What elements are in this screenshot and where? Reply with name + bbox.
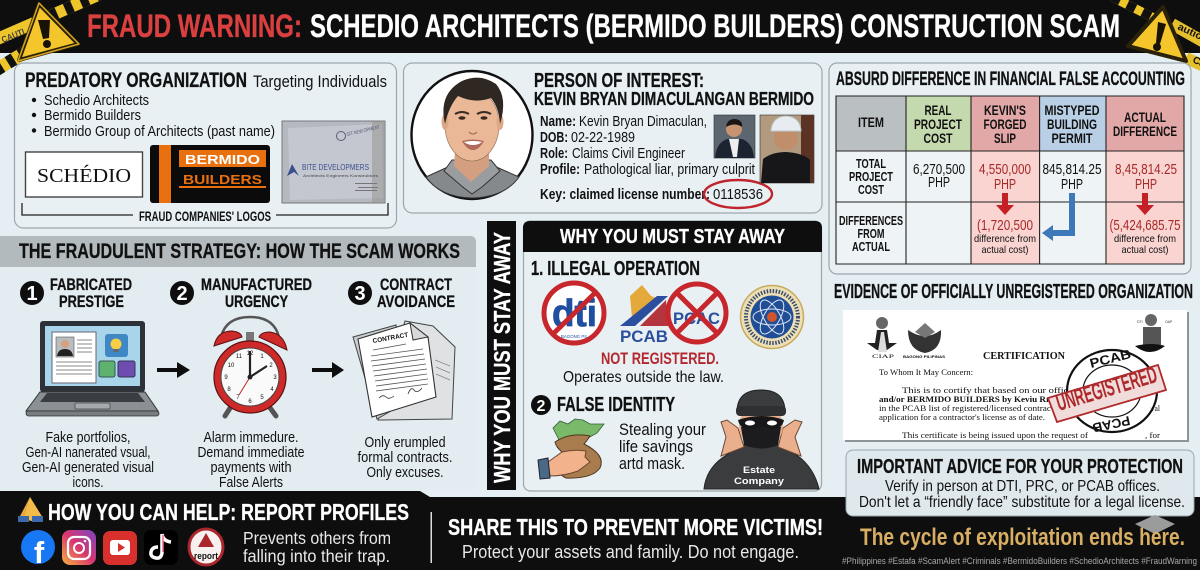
details list: Profile:	[540, 162, 580, 178]
logo: pcab: PCAB	[620, 327, 668, 346]
icon: alarm clock: 1	[260, 354, 264, 360]
document body text: and/or BERMIDO BUILDERS by Keviu Rr	[879, 395, 1051, 404]
heading bar	[523, 221, 822, 252]
icon: alarm clock	[214, 317, 287, 416]
table: DIFFERENCE	[1113, 123, 1177, 139]
icon: alarm clock: 12	[247, 351, 254, 357]
icon: alarm clock: 10	[228, 363, 235, 369]
key license number with red ellipse: Key: claimed license number:	[540, 187, 710, 203]
caption: step 3	[358, 434, 452, 481]
logo: bermido builders: BUILDERS	[183, 172, 262, 187]
caption: fraud companies logos bracket	[22, 203, 388, 224]
table	[836, 96, 1184, 264]
caption: step 2: Demand immediate	[198, 444, 304, 461]
table: difference from	[1114, 233, 1176, 245]
subheading: false identity: 2	[537, 398, 546, 415]
subheading: false identity	[531, 394, 675, 416]
stamp: pcab unregistered: PCAB	[1088, 346, 1132, 371]
text: not registered: Operates outside the law.	[563, 369, 724, 386]
table: PROJECT	[914, 116, 962, 132]
table: 6,270,500	[913, 162, 965, 178]
caption: step 2: False Alerts	[219, 474, 283, 491]
table: MISTYPED	[1044, 102, 1100, 118]
caption: step 3: Only erumpled	[364, 434, 446, 451]
icon: left caution tape and warning sign: CAUTI	[0, 27, 26, 45]
panel: certificate document	[843, 310, 1189, 442]
icon: alarm clock: 11	[236, 354, 243, 360]
icon: hand holding money bag	[538, 419, 604, 479]
icon: alarm clock: 4	[270, 387, 274, 393]
logo: bite developers business card	[282, 121, 385, 203]
help text: falling into their trap.	[243, 546, 390, 566]
icon: alarm clock: 6	[248, 399, 252, 405]
details list: DOB:	[540, 130, 568, 146]
footer: share call to action: Protect your assets and family. Do not engage.	[462, 542, 799, 562]
table: PHP	[994, 177, 1016, 193]
logo: bite developers business card: Architects Engineers Konstruktors	[303, 173, 378, 178]
stamp: pcab unregistered: PCAB	[1091, 413, 1131, 436]
logo: dti crossed out: BAGONG PIL	[561, 334, 588, 339]
logo: pcac crossed out	[668, 284, 726, 342]
step 3: contract avoidance	[348, 275, 455, 311]
footer: how you can help	[18, 497, 409, 570]
footer: share call to action	[448, 514, 823, 562]
step 3: contract avoidance: 3	[354, 283, 366, 305]
table: ITEM	[858, 114, 884, 130]
document body text	[879, 368, 1161, 440]
logo: bagong pilipinas: BAGONG PILIPINAS	[903, 354, 945, 359]
caption: step 3: formal contracts.	[358, 449, 452, 466]
table: actual cost)	[1122, 244, 1168, 256]
table: (1,720,500	[977, 218, 1033, 234]
help text	[243, 528, 391, 566]
table: BUILDING	[1047, 116, 1097, 132]
details list: Role:	[540, 146, 568, 162]
table: REAL	[924, 102, 952, 118]
icon: right caution tape and warning sign	[1112, 0, 1200, 70]
caption: step 1: Fake portfolios,	[46, 429, 130, 446]
text: stealing: artd mask.	[619, 454, 685, 473]
table: COST	[858, 182, 884, 197]
caption: step 2: payments with	[210, 459, 292, 476]
text: stealing: Stealing your	[619, 420, 706, 439]
text: stealing: life savings	[619, 437, 693, 456]
table: TOTAL	[856, 156, 886, 171]
document body text: in the PCAB list of registered/licensed contrac	[879, 404, 1052, 413]
logo: prc seal	[740, 286, 804, 348]
details list: 02-22-1989	[571, 130, 635, 146]
heading: predatory organization: PREDATORY ORGANIZATION	[25, 69, 247, 92]
table: PHP	[928, 175, 950, 191]
document body text: This certificate is being issued upon the request of	[902, 431, 1088, 440]
icon: instagram	[62, 530, 96, 565]
text: stealing	[619, 420, 706, 473]
document body text: wal	[1149, 404, 1161, 413]
icon: tiktok	[144, 530, 178, 565]
caption: step 2	[198, 429, 304, 491]
caption: step 1: Gen-AI nanerated vsual,	[26, 444, 150, 461]
step 1: fabricated prestige: FABRICATED	[50, 275, 132, 294]
icon: alarm clock: 5	[260, 395, 264, 401]
logo: dti crossed out	[544, 283, 604, 343]
step 1: fabricated prestige	[20, 275, 132, 311]
icon: alarm clock: 8	[227, 387, 231, 393]
heading: report profiles: HOW YOU CAN HELP: REPORT PROFILES	[48, 499, 409, 525]
heading: person of interest: KEVIN BRYAN DIMACULANGAN BERMIDO	[534, 89, 814, 109]
details list: Pathological liar, primary culprit	[584, 162, 755, 178]
icon: left caution tape and warning sign	[0, 0, 105, 70]
table: difference from	[974, 233, 1036, 245]
heading: person of interest	[534, 70, 814, 109]
icon: alarm clock: 9	[224, 375, 228, 381]
bullet list of names: Schedio Architects	[44, 93, 149, 109]
logo: right emblem: DTI	[1137, 320, 1143, 324]
advice text	[859, 478, 1185, 511]
step 1: fabricated prestige: PRESTIGE	[59, 292, 124, 311]
icon: masked thief estate company: Estate	[743, 465, 775, 476]
arrow: red down actual difference	[1136, 193, 1154, 215]
table: FORGED	[984, 116, 1026, 132]
step 1: fabricated prestige: 1	[26, 283, 38, 305]
panel: financial table	[829, 63, 1191, 274]
table: 845,814.25	[1042, 162, 1102, 178]
icon: masked thief estate company: Company	[734, 476, 785, 487]
logo: bermido builders	[150, 145, 270, 203]
icon: laptop	[26, 321, 159, 416]
title: FRAUD WARNING:	[87, 8, 302, 44]
table: actual cost)	[982, 244, 1028, 256]
table: PROJECT	[849, 169, 893, 184]
details list: Kevin Bryan Dimaculan,	[579, 114, 707, 130]
step 3: contract avoidance: AVOIDANCE	[377, 292, 455, 311]
icon: contract papers	[353, 321, 455, 420]
photo: suit	[714, 115, 755, 158]
photo: hard hat	[760, 115, 814, 183]
table: 4,550,000	[979, 162, 1031, 178]
table: PHP	[1061, 177, 1083, 193]
table: DIFFERENCES	[839, 213, 903, 228]
table: PERMIT	[1052, 130, 1093, 146]
table: SLIP	[994, 130, 1016, 146]
caption: step 1	[22, 429, 154, 491]
caption: step 1: Gen-AI generated visual	[22, 459, 154, 476]
logo: schedio: SCHÉDIO	[37, 164, 131, 187]
heading: fraudulent strategy	[0, 236, 476, 267]
table: FROM	[858, 226, 884, 241]
document body text: , for	[1145, 431, 1160, 440]
logo: right emblem: OAP	[1165, 320, 1173, 324]
illustration: portrait avatar	[412, 71, 532, 199]
panel: predatory organization	[14, 63, 396, 228]
table: PHP	[1135, 177, 1157, 193]
icon: youtube	[103, 531, 137, 565]
logo: dti crossed out: dti	[552, 293, 597, 335]
arrow: step 2 to 3	[312, 362, 344, 378]
heading bar: WHY YOU MUST STAY AWAY	[560, 226, 786, 248]
key license number with red ellipse: 0118536	[713, 187, 763, 203]
heading: person of interest: PERSON OF INTEREST:	[534, 70, 704, 92]
panel: important advice	[846, 450, 1194, 516]
table: COST	[924, 130, 953, 146]
icon: facebook: f	[34, 535, 45, 570]
caption: step 3: Only excuses.	[366, 464, 444, 481]
panel: why you must stay away	[523, 221, 822, 491]
icon: alarm clock: 7	[236, 395, 240, 401]
logo: pcab	[620, 285, 668, 346]
logo: ciap	[867, 317, 897, 360]
panel: fraudulent strategy	[0, 236, 476, 491]
text: not registered: NOT REGISTERED.	[601, 349, 719, 368]
arrow: step 1 to 2	[157, 362, 190, 378]
icon: gray graduation cap diamond	[1135, 515, 1175, 534]
icon: report badge: report	[194, 551, 219, 562]
step 2: manufactured urgency: 2	[176, 283, 188, 305]
logo: bagong pilipinas	[903, 323, 945, 359]
arrow: red down forged slip	[996, 193, 1014, 215]
icon: alarm clock: 3	[273, 375, 277, 381]
details list: Name:	[540, 114, 576, 130]
heading: fraudulent strategy: THE FRAUDULENT STRATEGY: HOW THE SCAM WORKS	[19, 240, 460, 263]
logo: right emblem	[1135, 314, 1173, 352]
caption: fraud companies logos bracket: FRAUD COMPANIES' LOGOS	[139, 209, 271, 224]
details list: Claims Civil Engineer	[572, 146, 685, 162]
bullet list of names: Bermido Builders	[44, 108, 141, 124]
logo: bite developers business card: GIT NEW OPMENT	[346, 124, 381, 138]
details list	[540, 114, 755, 178]
header band	[0, 0, 1200, 53]
subheading: illegal operation: 1. ILLEGAL OPERATION	[531, 258, 700, 280]
text: not registered	[563, 349, 724, 386]
table: ACTUAL	[1124, 109, 1166, 125]
table: (5,424,685.75	[1110, 218, 1180, 234]
icon: masked thief estate company	[704, 390, 819, 489]
logo: schedio	[26, 152, 142, 197]
arrow: blue elbow	[1042, 193, 1075, 241]
icon: praying hands	[18, 497, 43, 522]
document body text: To Whom It May Concern:	[879, 368, 973, 377]
step 2: manufactured urgency: URGENCY	[225, 292, 288, 311]
step 2: manufactured urgency: MANUFACTURED	[201, 275, 312, 294]
icon: report badge	[189, 529, 223, 565]
subheading: false identity: FALSE IDENTITY	[557, 394, 675, 416]
table: ACTUAL	[852, 239, 890, 254]
icon: alarm clock: 2	[269, 363, 273, 369]
logo: bite developers business card: BITE DEVELOPMERS	[302, 163, 369, 172]
table: KEVIN'S	[984, 102, 1026, 118]
panel: person of interest	[404, 63, 822, 213]
table: 8,45,814.25	[1115, 162, 1177, 178]
heading: predatory organization: Targeting Individuals	[253, 72, 387, 91]
logo: bermido builders: BERMIDO	[185, 152, 260, 167]
step 2: manufactured urgency	[170, 275, 312, 311]
document body text: application for a contractor's license as of date.	[879, 413, 1045, 422]
document body text: This is to cortify that based on our officicl a	[902, 386, 1087, 395]
footer: share call to action: SHARE THIS TO PREVENT MORE VICTIMS!	[448, 514, 823, 540]
caption: step 1: icons.	[72, 474, 104, 491]
icon: contract papers: CONTRACT	[372, 332, 409, 345]
vertical banner: why you must stay away: WHY YOU MUST STAY AWAY	[489, 232, 515, 483]
key license number with red ellipse	[540, 180, 772, 208]
step 3: contract avoidance: CONTRACT	[380, 275, 452, 294]
heading: certification: CERTIFICATION	[983, 351, 1066, 362]
logo: pcac crossed out: PCAC	[673, 309, 720, 328]
bullet list of names	[32, 93, 275, 140]
logo: ciap: CIAP	[872, 354, 894, 360]
footer black band	[0, 491, 1200, 570]
help text: Prevents others from	[243, 528, 391, 548]
caption: step 2: Alarm immedure.	[204, 429, 298, 446]
stamp: pcab unregistered	[1048, 346, 1166, 436]
bullet list of names: Bermido Group of Architects (past name)	[44, 124, 275, 140]
icon: facebook	[21, 530, 55, 570]
